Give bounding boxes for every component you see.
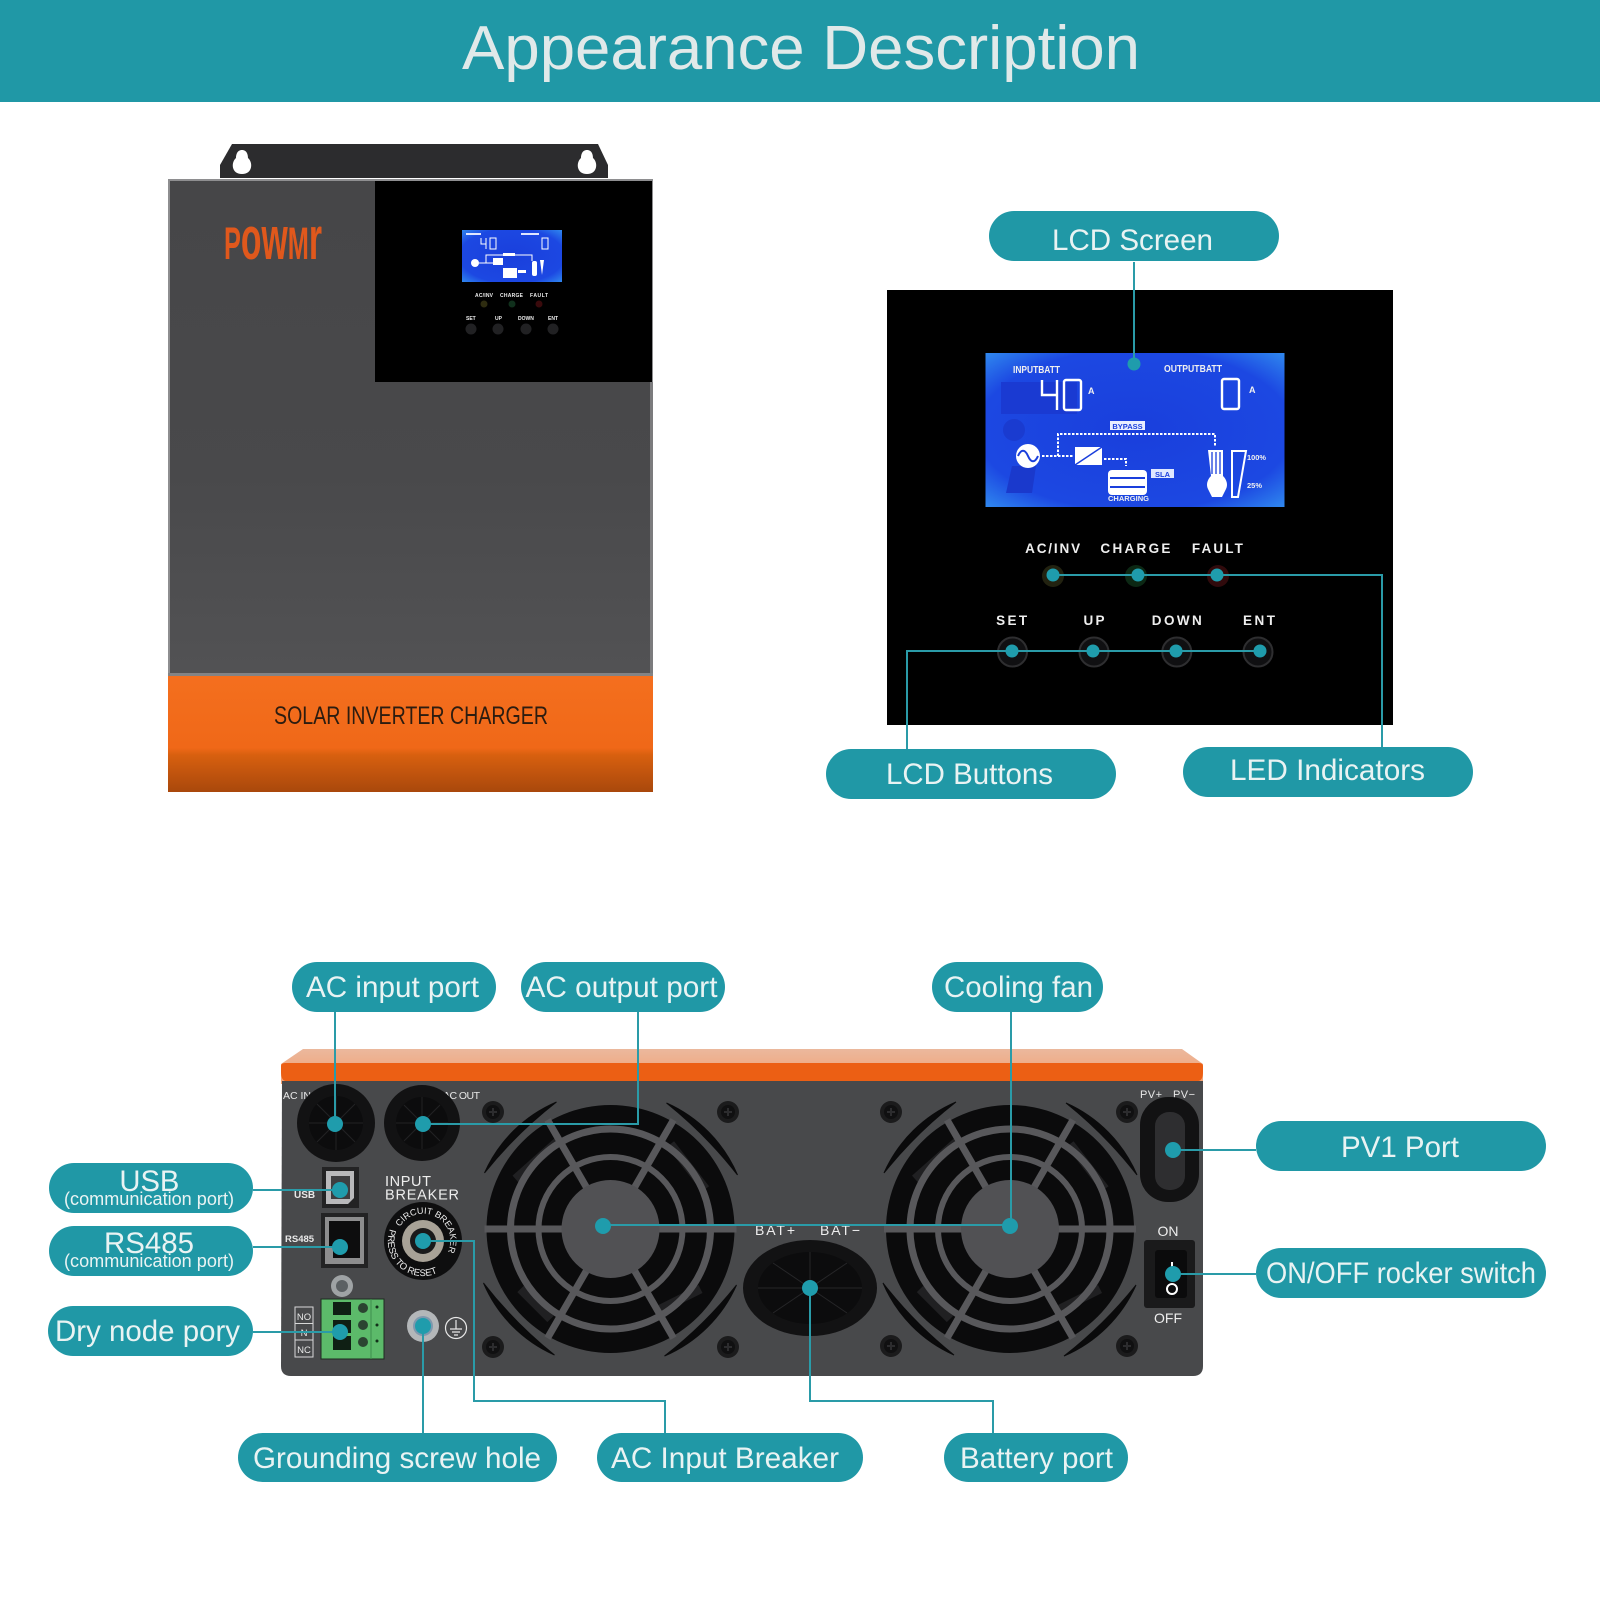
connector: Battery port <box>802 1280 993 1433</box>
pill: Cooling fan <box>932 962 1103 1012</box>
inverter front view <box>168 144 653 792</box>
button labels <box>996 613 1276 628</box>
product name: SOLAR INVERTER CHARGER <box>274 702 548 730</box>
battery terminal labels: BAT− <box>820 1222 860 1238</box>
RS485 port: RS485 <box>285 1234 315 1245</box>
pill: LED Indicators <box>1183 747 1473 797</box>
pill: USB <box>49 1163 253 1213</box>
small LED labels and lights: FAULT <box>530 293 548 299</box>
small buttons <box>466 316 558 334</box>
AC input gland <box>297 1084 375 1162</box>
PV ports <box>1140 1089 1199 1202</box>
blue LCD screen: CHARGING <box>1108 496 1150 503</box>
blue LCD screen: BYPASS <box>1112 422 1143 431</box>
black control panel <box>375 181 652 382</box>
connector: AC Input Breaker <box>415 1233 665 1433</box>
LED labels: FAULT <box>1192 541 1244 556</box>
pill: Battery port: Battery port <box>960 1442 1114 1475</box>
RS485 port <box>285 1213 368 1268</box>
USB port: USB <box>294 1190 315 1201</box>
grey housing <box>168 179 653 676</box>
button labels: ENT <box>1243 613 1276 628</box>
pill: Dry node pory <box>48 1306 253 1356</box>
pill: PV1 Port <box>1256 1121 1546 1171</box>
pill: ON/OFF rocker switch <box>1256 1248 1546 1298</box>
pill: AC output port: AC output port <box>526 971 718 1004</box>
pill: RS485 <box>49 1226 253 1276</box>
orange base <box>168 676 653 792</box>
buttons <box>998 638 1272 666</box>
AC IN label: AC IN <box>283 1090 311 1102</box>
battery terminal labels: BAT+ <box>755 1222 795 1238</box>
connector: Dry node <box>253 1324 348 1340</box>
header band <box>0 0 1600 102</box>
rocker switch: OFF <box>1154 1310 1182 1326</box>
pill: PV1 Port: PV1 Port <box>1341 1131 1460 1164</box>
LED labels: AC/INV <box>1025 541 1080 556</box>
small LED labels and lights: CHARGE <box>500 293 524 299</box>
INPUT BREAKER label <box>385 1174 459 1204</box>
cooling fan right <box>883 1102 1137 1356</box>
small buttons: SET <box>466 316 476 322</box>
NO N NC labels: NC <box>297 1345 311 1356</box>
USB port <box>294 1167 359 1208</box>
connector: LCD Buttons <box>907 644 1266 769</box>
INPUT BREAKER label: INPUT <box>385 1174 431 1190</box>
blue LCD screen: A <box>1249 385 1256 395</box>
connector: Grounding screw hole <box>415 1318 431 1433</box>
connector: USB <box>253 1182 348 1198</box>
connector: Cooling fan <box>595 1011 1018 1234</box>
pill: USB: (communication port) <box>64 1189 234 1209</box>
pill: AC input port <box>292 962 496 1012</box>
AC output gland <box>384 1085 460 1161</box>
INPUT BREAKER label: BREAKER <box>385 1188 459 1204</box>
panel screws <box>482 1101 1138 1358</box>
small LCD screen <box>462 230 562 282</box>
pill: Grounding screw hole <box>238 1433 557 1482</box>
NO N NC labels: N <box>301 1328 308 1339</box>
circuit breaker <box>384 1202 462 1280</box>
button labels: UP <box>1084 613 1104 628</box>
blue LCD screen: OUTPUTBATT <box>1164 364 1222 375</box>
pill: AC input port: AC input port <box>306 971 480 1004</box>
terminal screw <box>331 1275 353 1297</box>
battery terminal labels <box>755 1222 860 1238</box>
blue LCD screen: 25% <box>1247 481 1262 490</box>
LED labels <box>1025 541 1244 556</box>
PV ports: PV+ <box>1140 1089 1162 1101</box>
pill: LED Indicators: LED Indicators <box>1230 754 1425 787</box>
pill: Dry node pory: Dry node pory <box>55 1315 240 1348</box>
pill: AC Input Breaker <box>597 1433 863 1482</box>
small buttons: ENT <box>548 316 558 322</box>
LCD detail panel <box>887 290 1393 725</box>
small buttons: UP <box>495 316 503 322</box>
NO N NC labels <box>295 1307 313 1357</box>
connector: AC input port <box>327 1011 343 1132</box>
pill: Grounding screw hole: Grounding screw hole <box>253 1442 541 1475</box>
rocker switch <box>1144 1223 1195 1326</box>
inverter rear view <box>281 1049 1203 1376</box>
small LED labels and lights <box>475 293 548 308</box>
orange top face <box>281 1049 1203 1084</box>
title: Appearance Description <box>462 13 1140 83</box>
pill: AC Input Breaker: AC Input Breaker <box>611 1442 839 1475</box>
blue LCD screen: SLA <box>1155 470 1171 479</box>
blue LCD screen: INPUTBATT <box>1013 365 1060 376</box>
connector: LCD Screen <box>1128 262 1140 370</box>
connector: ON/OFF switch <box>1165 1266 1256 1282</box>
connector: AC output port <box>415 1011 638 1132</box>
pill: LCD Buttons: LCD Buttons <box>886 758 1053 791</box>
pill: ON/OFF rocker switch: ON/OFF rocker switch <box>1266 1257 1536 1290</box>
mounting bracket <box>220 144 608 178</box>
pill: Battery port <box>944 1433 1128 1482</box>
pill: USB: USB <box>119 1165 179 1198</box>
PowMr logo: PowMr <box>224 205 322 272</box>
AC OUT label: AC OUT <box>443 1090 481 1102</box>
PV ports: PV− <box>1173 1089 1195 1101</box>
grey rear panel <box>281 1081 1203 1376</box>
pill: LCD Screen <box>989 211 1279 261</box>
rocker switch: ON <box>1158 1223 1178 1239</box>
connector: RS485 <box>253 1239 348 1255</box>
connector: PV1 Port <box>1165 1142 1256 1158</box>
circuit breaker: CIRCUIT BREAKER <box>396 1207 456 1253</box>
button labels: SET <box>996 613 1028 628</box>
small LED labels and lights: AC/INV <box>475 293 494 299</box>
LED lights <box>1042 565 1229 587</box>
pill: RS485: RS485 <box>104 1227 194 1260</box>
pill: AC output port <box>521 962 725 1012</box>
pill: RS485: (communication port) <box>64 1251 234 1271</box>
blue LCD screen: A <box>1088 386 1095 396</box>
pill: LCD Screen: LCD Screen <box>1052 224 1213 257</box>
cooling fan left <box>484 1102 738 1356</box>
blue LCD screen: 100% <box>1247 453 1266 462</box>
green terminal block <box>321 1299 384 1359</box>
LED labels: CHARGE <box>1100 541 1170 556</box>
circuit breaker: PRESS TO RESET <box>388 1230 436 1276</box>
pill: LCD Buttons <box>826 749 1116 799</box>
NO N NC labels: NO <box>297 1312 311 1323</box>
grounding screw <box>407 1310 439 1342</box>
small buttons: DOWN <box>518 316 534 322</box>
ground symbol <box>446 1318 466 1338</box>
button labels: DOWN <box>1152 613 1202 628</box>
battery gland <box>743 1240 877 1336</box>
connector: LED Indicators <box>1046 568 1382 767</box>
blue LCD screen <box>986 353 1284 507</box>
pill: Cooling fan: Cooling fan <box>944 971 1093 1004</box>
